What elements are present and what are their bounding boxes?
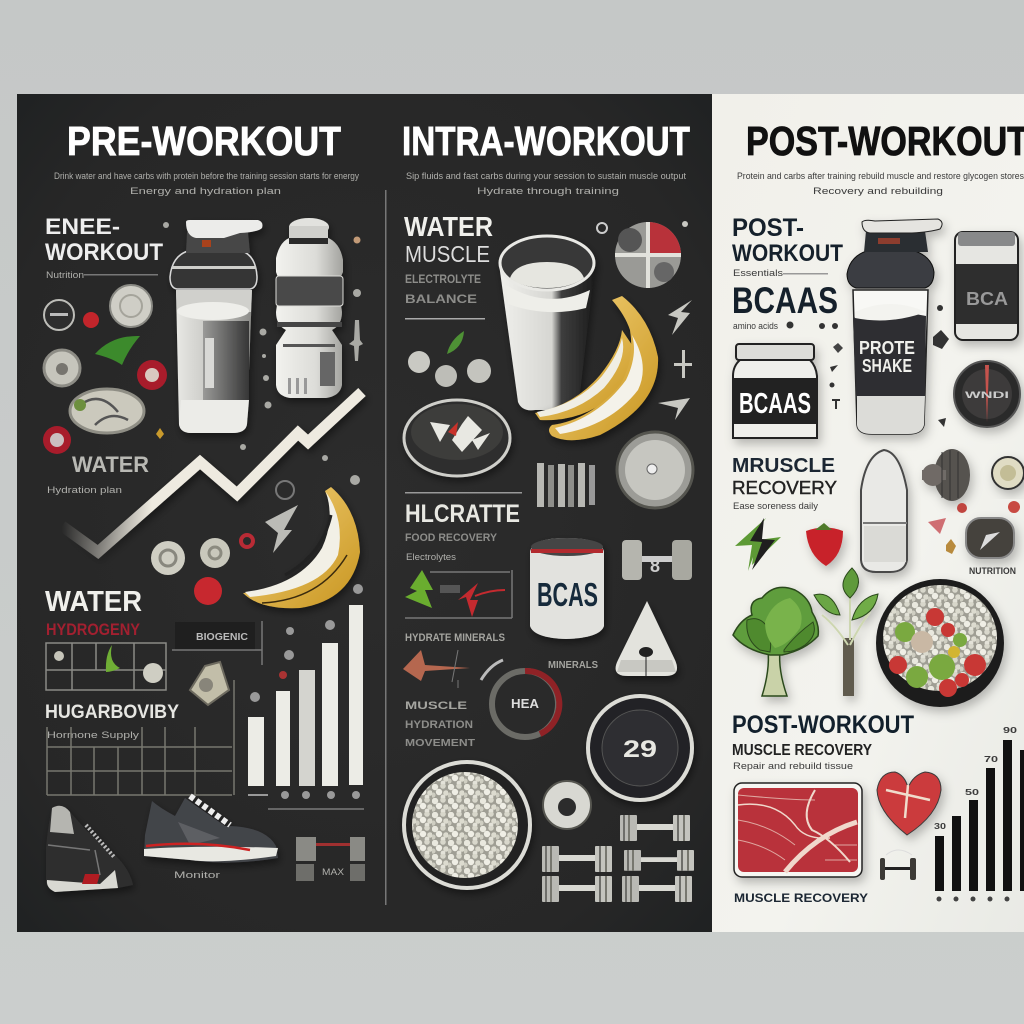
icon: spinach leaves xyxy=(733,587,818,696)
icon: banana xyxy=(243,487,360,608)
heading: intra-workout: INTRA-WORKOUT xyxy=(402,118,690,164)
icons: nutrients cluster xyxy=(43,285,167,454)
icon: ring dial: HEA xyxy=(511,696,540,711)
caption: muscle recovery: MUSCLE RECOVERY xyxy=(734,891,868,905)
icon: shaker bottle xyxy=(170,220,262,433)
subheading: water and hydration xyxy=(45,586,142,639)
icon: spark line xyxy=(403,650,503,688)
subheading: energy workout: Nutrition xyxy=(46,270,84,280)
intro text: Recovery and rebuilding xyxy=(813,186,943,196)
text block: muscle hydration: MOVEMENT xyxy=(405,738,475,749)
icon: nutrient chart wheel xyxy=(615,222,681,288)
footer note: Monitor xyxy=(174,870,220,880)
icon: running shoe xyxy=(144,796,278,863)
heading: post-workout recovery: MUSCLE RECOVERY xyxy=(732,742,872,759)
speckle icons xyxy=(163,222,363,485)
label box: BIOGENIC xyxy=(196,632,248,643)
icon: triangle xyxy=(616,601,677,676)
caption: HYDRATE MINERALS xyxy=(405,632,505,644)
icon: small marks xyxy=(830,305,949,427)
hydration table xyxy=(46,643,166,690)
icon: heart xyxy=(877,772,941,835)
icon: button xyxy=(543,781,591,829)
icon: supplement tub: BCA xyxy=(966,289,1008,309)
icon: dumbbell knob xyxy=(922,449,970,501)
icon: protein shaker: PROTE xyxy=(859,338,915,358)
intro text: Drink water and have carbs with protein before the training session starts for energy xyxy=(54,171,359,181)
icon: white bottle xyxy=(861,450,907,572)
subheading: muscle recovery: RECOVERY xyxy=(732,478,837,498)
subheading: recovery: HUGARBOVIBY xyxy=(45,702,179,723)
intro text xyxy=(406,171,686,196)
recovery table: Hormone Supply xyxy=(47,730,140,740)
icon: dumbbell rack xyxy=(268,808,365,881)
subheading: bcaas xyxy=(732,280,838,331)
icons: supplement pills xyxy=(151,481,298,605)
bar chart: 50 xyxy=(965,788,980,797)
panel: intra-workout xyxy=(385,118,694,905)
divider xyxy=(405,492,522,494)
icon: meat tray xyxy=(734,783,862,877)
panel: pre-workout xyxy=(43,118,365,892)
subheading: energy workout xyxy=(45,214,163,280)
icon: supplement tub xyxy=(955,232,1018,340)
icon: food bowl xyxy=(876,579,1004,707)
subheading: post-workout xyxy=(732,214,843,278)
intro text: Sip fluids and fast carbs during your session to sustain muscle output xyxy=(406,171,686,181)
intro text xyxy=(737,171,1024,196)
subheading: water and hydration: HYDROGENY xyxy=(46,620,141,639)
subheading: bcaas: BCAAS xyxy=(732,280,838,321)
subheading: bcaas: amino acids xyxy=(733,321,778,331)
text block: muscle hydration xyxy=(405,700,475,749)
icon: dumbbell emblem xyxy=(622,540,692,580)
label box xyxy=(172,621,262,665)
subheading: energy workout: WORKOUT xyxy=(45,239,163,266)
heading: pre-workout: PRE-WORKOUT xyxy=(67,118,341,164)
electrolyte chart xyxy=(405,552,512,618)
line chart arrow xyxy=(62,392,362,552)
subheading: water muscle xyxy=(404,211,493,320)
icon: compass disc: WNDI xyxy=(965,390,1009,400)
icon: supplement bottle xyxy=(276,218,343,398)
subheading: water: WATER xyxy=(72,452,149,477)
subheading: water muscle: ELECTROLYTE xyxy=(405,272,481,286)
subheading: muscle recovery: Ease soreness daily xyxy=(733,501,819,511)
subheading: post-workout: WORKOUT xyxy=(732,240,843,267)
icon: strawberry xyxy=(806,523,843,566)
icon: protein shaker xyxy=(847,219,942,434)
text block: muscle hydration: HYDRATION xyxy=(405,719,473,731)
icon: dumbbell emblem: 8 xyxy=(650,556,660,576)
intro text xyxy=(54,171,359,196)
icon: high-top shoe xyxy=(46,806,133,892)
bar chart: 70 xyxy=(984,755,999,764)
icon: bars xyxy=(537,463,595,507)
subheading: water muscle: MUSCLE xyxy=(405,241,490,267)
icons: small sparks xyxy=(597,221,692,420)
icons: berries and bits xyxy=(928,501,1020,554)
icon: bcaas jar: BCAAS xyxy=(739,388,811,420)
recovery table xyxy=(47,680,234,795)
icon: sprout xyxy=(814,568,878,696)
icon: disc emblem xyxy=(966,518,1014,558)
icon: weight plate xyxy=(617,432,693,508)
icon: gauge: 29 xyxy=(623,736,657,763)
icon: glass of shake xyxy=(499,236,595,410)
icon: protein shaker: SHAKE xyxy=(862,356,912,376)
icon: lightning leaf xyxy=(735,518,781,571)
icons: nuts and leaf xyxy=(408,331,491,387)
intro text: Hydrate through training xyxy=(477,186,619,196)
dark backing for the two dark panels xyxy=(17,94,712,932)
bar chart xyxy=(248,584,363,799)
text block: muscle hydration: MUSCLE xyxy=(405,700,467,712)
subheading: post-workout: Essentials xyxy=(733,268,784,278)
icon: nut medallion xyxy=(190,662,229,705)
icon: bcaas jar xyxy=(733,344,817,438)
icon: compass disc xyxy=(954,361,1020,427)
bar chart xyxy=(934,726,1024,902)
subheading: muscle recovery: MRUSCLE xyxy=(732,455,835,477)
subheading: water muscle: BALANCE xyxy=(405,292,477,306)
subheading: water and hydration: WATER xyxy=(45,586,142,618)
subheading: energy workout: ENEE- xyxy=(45,214,120,239)
subheading: hydrate xyxy=(405,500,520,544)
subheading: water: Hydration plan xyxy=(47,485,122,495)
subheading: water xyxy=(47,452,149,495)
panel: post-workout xyxy=(712,94,1024,932)
subheading: water muscle: WATER xyxy=(404,211,493,242)
bar chart: 30 xyxy=(934,822,947,831)
electrolyte chart: Electrolytes xyxy=(406,552,457,562)
caption: NUTRITION xyxy=(969,566,1016,576)
icon: small dumbbell xyxy=(880,850,916,880)
icon: gauge xyxy=(588,696,692,800)
icon: bcaa jar xyxy=(530,538,604,639)
icons: dumbbells xyxy=(542,815,694,902)
subheading: post-workout: POST- xyxy=(732,214,804,242)
icon: ring dial xyxy=(492,671,559,737)
heading: post-workout recovery: POST-WORKOUT xyxy=(732,711,914,739)
bar chart: 90 xyxy=(1003,726,1018,735)
heading: post-workout recovery xyxy=(732,711,914,771)
heading: post-workout recovery: Repair and rebuild tissue xyxy=(733,761,853,771)
icon: coconut disc xyxy=(992,457,1024,489)
subheading: muscle recovery xyxy=(732,455,837,511)
label: MINERALS xyxy=(548,660,598,671)
icon: bowl xyxy=(404,400,510,476)
subheading: hydrate: FOOD RECOVERY xyxy=(405,532,498,544)
icon: bananas xyxy=(535,296,658,440)
subheading: hydrate: HLCRATTE xyxy=(405,500,520,528)
icon: bcaa jar: BCAS xyxy=(537,576,598,613)
intro text: Energy and hydration plan xyxy=(130,186,281,196)
icon: dumbbell rack: MAX xyxy=(322,867,344,877)
icon: rice bowl xyxy=(404,762,530,888)
